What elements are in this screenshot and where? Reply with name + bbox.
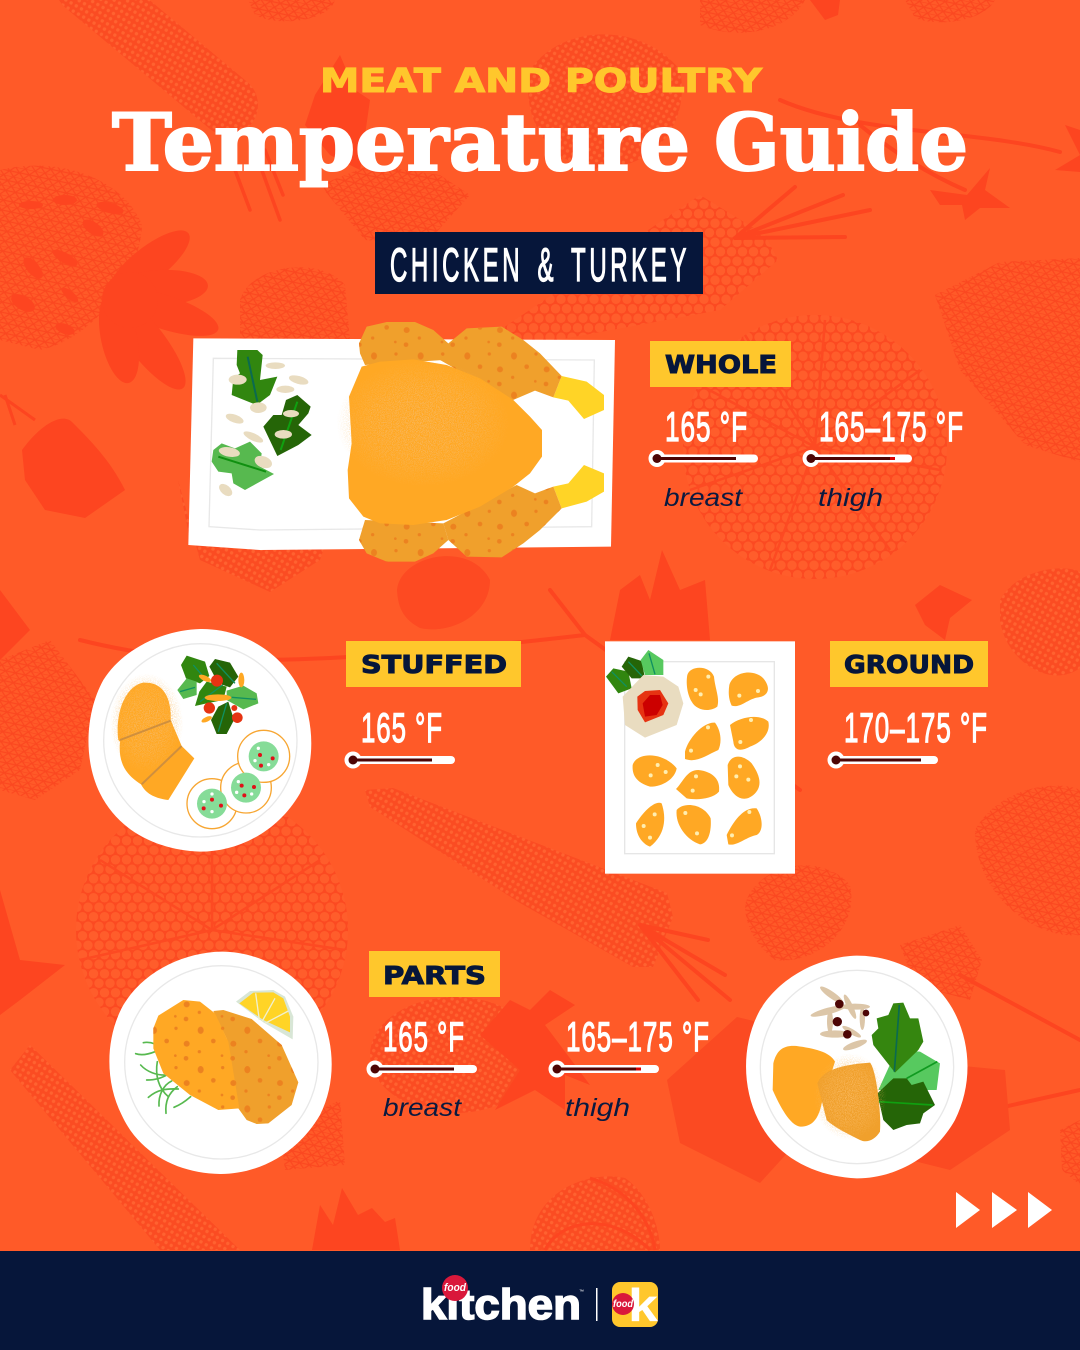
logo: app icon: k [628, 1279, 658, 1331]
parts breast temperature: breast [383, 1094, 462, 1122]
whole thigh temperature: thigh [818, 484, 883, 512]
parts thigh temperature: thigh [565, 1094, 630, 1122]
whole breast temperature: breast [664, 484, 743, 512]
ground: label and temperature: GROUND [844, 650, 974, 679]
stuffed: label and temperature [344, 641, 521, 768]
illustration: ground turkey nuggets on platter [605, 641, 795, 874]
whole breast temperature [648, 403, 754, 512]
ground: label and temperature [828, 641, 988, 768]
whole breast temperature: 165 °F [665, 403, 748, 450]
illustration: whole chicken on platter [188, 322, 615, 562]
background citrus lower [76, 794, 348, 1066]
whole: label and temperatures [648, 341, 964, 512]
parts thigh temperature: 165–175 °F [566, 1013, 710, 1060]
title: Guide [714, 96, 968, 189]
title: Temperature [112, 96, 690, 189]
logo: food network kitchen: ™ [579, 1289, 584, 1295]
background tomato [370, 990, 590, 1113]
parts breast temperature [366, 1013, 473, 1122]
background leaf [92, 220, 223, 399]
logo: app icon: food [613, 1299, 634, 1310]
title [112, 96, 968, 189]
parts thigh temperature [548, 1013, 710, 1122]
eyebrow: meat and poultry: MEAT AND POULTRY [320, 61, 763, 100]
ground: label and temperature: 170–175 °F [844, 704, 988, 751]
section badge: chicken and turkey: CHICKEN & TURKEY [390, 238, 690, 291]
parts: label and temperatures [366, 951, 710, 1122]
illustration: chicken parts plate with lemon [109, 952, 332, 1174]
section badge: chicken and turkey [375, 232, 703, 294]
parts breast temperature: 165 °F [383, 1013, 465, 1060]
illustration: chicken pieces plate with greens and rice [746, 956, 967, 1178]
whole thigh temperature: 165–175 °F [819, 403, 964, 450]
next arrows [956, 1192, 1052, 1228]
stuffed: label and temperature: STUFFED [361, 650, 507, 679]
parts: label and temperatures: PARTS [383, 961, 486, 990]
logo: food network kitchen: kitchen [421, 1281, 581, 1329]
whole thigh temperature [802, 403, 964, 512]
footer bar [0, 1251, 1080, 1350]
background citrus [683, 315, 947, 579]
whole: label and temperatures: WHOLE [665, 350, 777, 379]
logo: food network kitchen: food [444, 1282, 466, 1294]
illustration: stuffed chicken plate [88, 629, 311, 852]
stuffed: label and temperature: 165 °F [361, 704, 443, 751]
logo: app icon [612, 1279, 658, 1331]
